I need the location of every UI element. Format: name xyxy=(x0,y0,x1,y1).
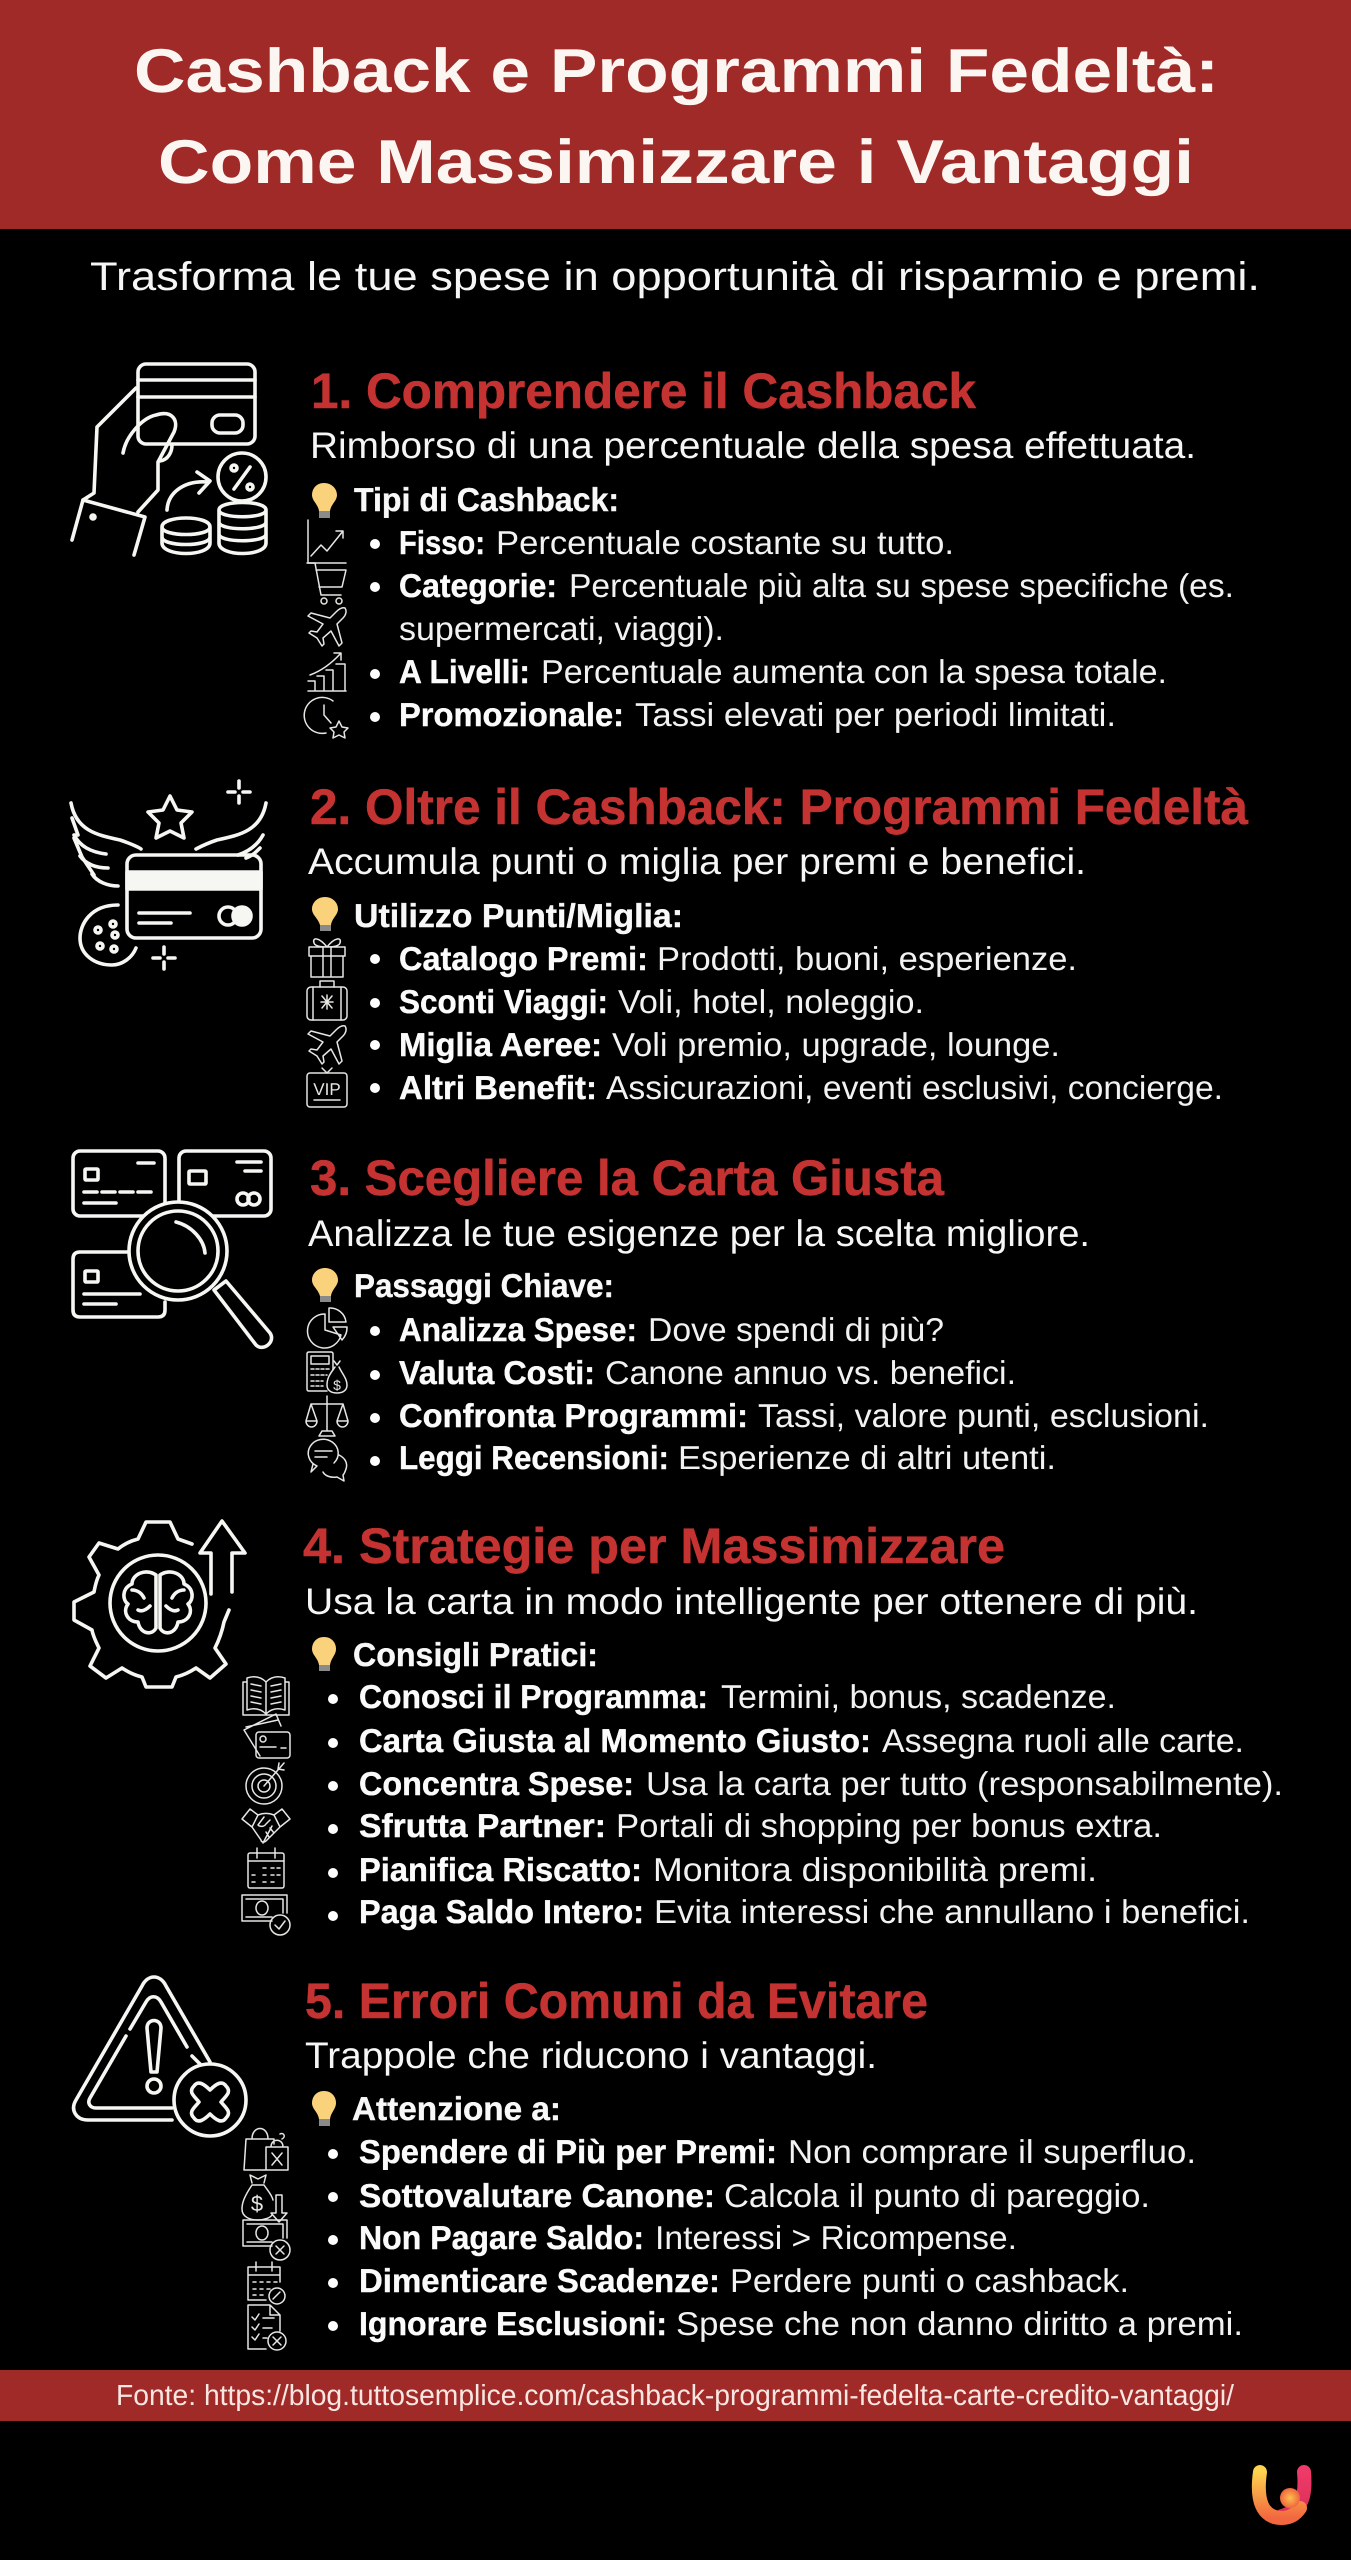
icon: clock with star xyxy=(304,697,348,738)
list item: Conosci il Programma: Termini, bonus, scadenze. xyxy=(721,1678,1116,1715)
list item: Catalogo Premi: Prodotti, buoni, esperienze. xyxy=(657,940,1077,977)
footer source bar: Fonte: https://blog.tuttosemplice.com/cashback-programmi-fedelta-carte-credito-vantaggi/ xyxy=(116,2380,1235,2412)
icon: pie chart xyxy=(307,1308,347,1348)
icon: credit cards xyxy=(244,1714,290,1758)
list item: Concentra Spese xyxy=(328,1765,1283,1802)
header banner xyxy=(0,0,1351,229)
list item: Concentra Spese: Usa la carta per tutto (responsabilmente). xyxy=(646,1765,1283,1802)
list item: Pianifica Riscatto: Pianifica Riscatto: xyxy=(359,1851,642,1888)
icon: three cards with magnifier xyxy=(73,1151,272,1347)
panel: 4. Strategie per Massimizzare xyxy=(74,1518,1283,1935)
list item: Leggi Recensioni: Leggi Recensioni: xyxy=(399,1439,669,1476)
list item: Fisso: Fisso: xyxy=(399,524,485,561)
icon: VIP ticket: VIP xyxy=(313,1080,341,1099)
list item: Fisso: Percentuale costante su tutto. xyxy=(496,524,954,561)
list item: Catalogo Premi xyxy=(370,940,1077,977)
icon: balance scale xyxy=(306,1396,348,1436)
list item: Sottovalutare Canone: Calcola il punto di pareggio. xyxy=(724,2177,1150,2214)
list item: Ignorare Esclusioni: Spese che non danno diritto a premi. xyxy=(676,2305,1243,2342)
list item: Valuta Costi: Canone annuo vs. benefici. xyxy=(605,1354,1016,1391)
list item: Spendere di Più xyxy=(328,2133,1196,2170)
description: Accumula punti o miglia per premi e benefici. xyxy=(308,841,1086,882)
logo xyxy=(1259,2472,1305,2518)
icon: line chart xyxy=(308,520,346,563)
list item: Categorie: supermercati, viaggi). xyxy=(399,610,724,647)
list item: Dimenticare Scadenze: Dimenticare Scadenze: xyxy=(359,2262,720,2299)
icon: growth bars xyxy=(308,653,346,691)
tip label with bulb: Passaggi Chiave: xyxy=(354,1267,614,1304)
list item: Confronta Programmi: Confronta Programmi: xyxy=(399,1397,748,1434)
icon: open book xyxy=(243,1677,289,1715)
list item: Sfrutta Partner xyxy=(328,1807,1162,1844)
list item: Non Pagare Saldo xyxy=(328,2219,1017,2256)
list item: Analizza Spese: Dove spendi di più? xyxy=(648,1311,944,1348)
panel: 1. Comprendere il Cashback xyxy=(72,363,1234,738)
icon: winged card with star xyxy=(71,781,266,969)
list item: Conosci il Programma: Conosci il Programma: xyxy=(359,1678,708,1715)
list item: Promozionale: Promozionale: xyxy=(399,696,624,733)
list item: A Livelli: A Livelli: xyxy=(399,653,530,690)
icon: suitcase xyxy=(307,981,347,1020)
list item: Miglia Aeree xyxy=(370,1026,1060,1063)
list item: Analizza Spese xyxy=(370,1311,944,1348)
list item: Sfrutta Partner: Portali di shopping per bonus extra. xyxy=(616,1807,1162,1844)
list item: Altri Benefit: Assicurazioni, eventi esclusivi, concierge. xyxy=(606,1069,1223,1106)
list item: Pianifica Riscatto xyxy=(328,1851,1097,1888)
icon: target with dart xyxy=(246,1763,284,1804)
list item: Non Pagare Saldo: Interessi > Ricompense. xyxy=(655,2219,1017,2256)
list item: Ignorare Esclusioni: Ignorare Esclusioni: xyxy=(359,2305,667,2342)
icon: shopping bags with X xyxy=(244,2128,288,2170)
list item: Leggi Recensioni: Esperienze di altri utenti. xyxy=(678,1439,1056,1476)
panel: 3. Scegliere la Carta Giusta xyxy=(73,1150,1209,1481)
heading: 5. Errori Comuni da Evitare xyxy=(305,1973,928,2029)
title: Come Massimizzare i Vantaggi xyxy=(158,128,1194,197)
icon: warning triangle with X xyxy=(74,1977,246,2136)
icon: calculator and money bag xyxy=(307,1352,347,1393)
tip label with bulb: Attenzione a: xyxy=(352,2090,561,2127)
list item: Confronta Programmi: Tassi, valore punti, esclusioni. xyxy=(758,1397,1209,1434)
list item: Promozionale xyxy=(370,696,1116,733)
list item: Concentra Spese: Concentra Spese: xyxy=(359,1765,634,1802)
list item: Miglia Aeree: Voli premio, upgrade, lounge. xyxy=(612,1026,1060,1063)
list item: Sottovalutare Canone xyxy=(328,2177,1150,2214)
description: Usa la carta in modo intelligente per ottenere di più. xyxy=(305,1581,1198,1622)
icon: handshake xyxy=(242,1809,290,1843)
panel: 2. Oltre il Cashback xyxy=(71,779,1248,1107)
tip label with bulb: Utilizzo Punti/Miglia: xyxy=(354,897,683,934)
list item: Paga Saldo Intero xyxy=(328,1893,1250,1930)
list item: Paga Saldo Intero: Evita interessi che annullano i benefici. xyxy=(654,1893,1250,1930)
list item: Pianifica Riscatto: Monitora disponibilità premi. xyxy=(653,1851,1097,1888)
list item: Promozionale: Tassi elevati per periodi limitati. xyxy=(635,696,1116,733)
icon: money bag with down arrow: $ xyxy=(251,2191,263,2216)
list item: Leggi Recensioni xyxy=(370,1439,1056,1476)
list item: Conosci il Programma xyxy=(328,1678,1116,1715)
list item: Spendere di Più: Non comprare il superfluo. xyxy=(788,2133,1196,2170)
list item: Categorie: Categorie: xyxy=(399,567,557,604)
list item: Miglia Aeree: Miglia Aeree: xyxy=(399,1026,602,1063)
list item: Carta Giusta: Carta Giusta al Momento Giusto: xyxy=(359,1722,871,1759)
list item: Confronta Programmi xyxy=(370,1397,1209,1434)
tip label with bulb: Tipi di Cashback: xyxy=(354,481,619,518)
icon: banknote with X xyxy=(243,2220,290,2260)
icon: gift xyxy=(309,939,345,977)
list item: Altri Benefit: Altri Benefit: xyxy=(399,1069,597,1106)
tip label with bulb: Consigli Pratici: xyxy=(353,1636,598,1673)
list item: Spendere di Più: Spendere di Più per Premi: xyxy=(359,2133,777,2170)
heading: 4. Strategie per Massimizzare xyxy=(303,1518,1005,1574)
list item: Valuta Costi xyxy=(370,1354,1016,1391)
list item: Ignorare Esclusioni xyxy=(328,2305,1243,2342)
list item: Sottovalutare Canone: Sottovalutare Canone: xyxy=(359,2177,715,2214)
title xyxy=(134,37,1219,197)
icon: money bag with down arrow xyxy=(242,2175,287,2222)
list item: Categorie: Percentuale più alta su spese specifiche (es. xyxy=(569,567,1234,604)
icon: shopping cart xyxy=(307,563,346,604)
list item: A Livelli: Percentuale aumenta con la spesa totale. xyxy=(541,653,1167,690)
list item: Analizza Spese: Analizza Spese: xyxy=(399,1311,637,1348)
list item: Valuta Costi: Valuta Costi: xyxy=(399,1354,595,1391)
heading: 3. Scegliere la Carta Giusta xyxy=(310,1150,945,1206)
icon: airplane xyxy=(308,608,346,646)
panel: 5. Errori Comuni da Evitare xyxy=(74,1973,1243,2350)
list item: Dimenticare Scadenze: Perdere punti o cashback. xyxy=(730,2262,1129,2299)
icon: calendar xyxy=(248,1848,284,1888)
description: Rimborso di una percentuale della spesa effettuata. xyxy=(310,425,1196,466)
list item: Carta Giusta xyxy=(328,1722,1244,1759)
icon: checklist document with X xyxy=(248,2305,286,2350)
list item: Dimenticare Scadenze xyxy=(328,2262,1129,2299)
list item: Catalogo Premi: Catalogo Premi: xyxy=(399,940,648,977)
icon: hand with card and coins xyxy=(72,364,266,555)
icon: chat bubbles xyxy=(308,1439,347,1481)
list item: Sconti Viaggi: Voli, hotel, noleggio. xyxy=(618,983,924,1020)
subtitle: Trasforma le tue spese in opportunità di risparmio e premi. xyxy=(90,255,1260,299)
list item: Sfrutta Partner: Sfrutta Partner: xyxy=(359,1807,606,1844)
list item: Paga Saldo Intero: Paga Saldo Intero: xyxy=(359,1893,644,1930)
icon: VIP ticket xyxy=(307,1068,347,1107)
title: Cashback e Programmi Fedeltà: xyxy=(134,37,1219,106)
icon: gear with brain and arrow xyxy=(74,1521,245,1687)
list item: Sconti Viaggi: Sconti Viaggi: xyxy=(399,983,608,1020)
icon: banknote with check xyxy=(242,1895,290,1935)
list item: Sconti Viaggi xyxy=(370,983,924,1020)
icon: calculator and money bag: $ xyxy=(333,1377,341,1393)
list item: Categorie xyxy=(370,567,1234,647)
icon: calendar with check xyxy=(248,2262,285,2304)
description: Analizza le tue esigenze per la scelta migliore. xyxy=(308,1213,1090,1254)
heading: 2. Oltre il Cashback: Programmi Fedeltà xyxy=(310,779,1248,835)
heading: 1. Comprendere il Cashback xyxy=(311,363,976,419)
footer source bar xyxy=(0,2370,1351,2421)
list item: Non Pagare Saldo: Non Pagare Saldo: xyxy=(359,2219,644,2256)
description: Trappole che riducono i vantaggi. xyxy=(305,2035,877,2076)
list item: Carta Giusta: Assegna ruoli alle carte. xyxy=(882,1722,1244,1759)
icon: airplane xyxy=(308,1026,346,1064)
